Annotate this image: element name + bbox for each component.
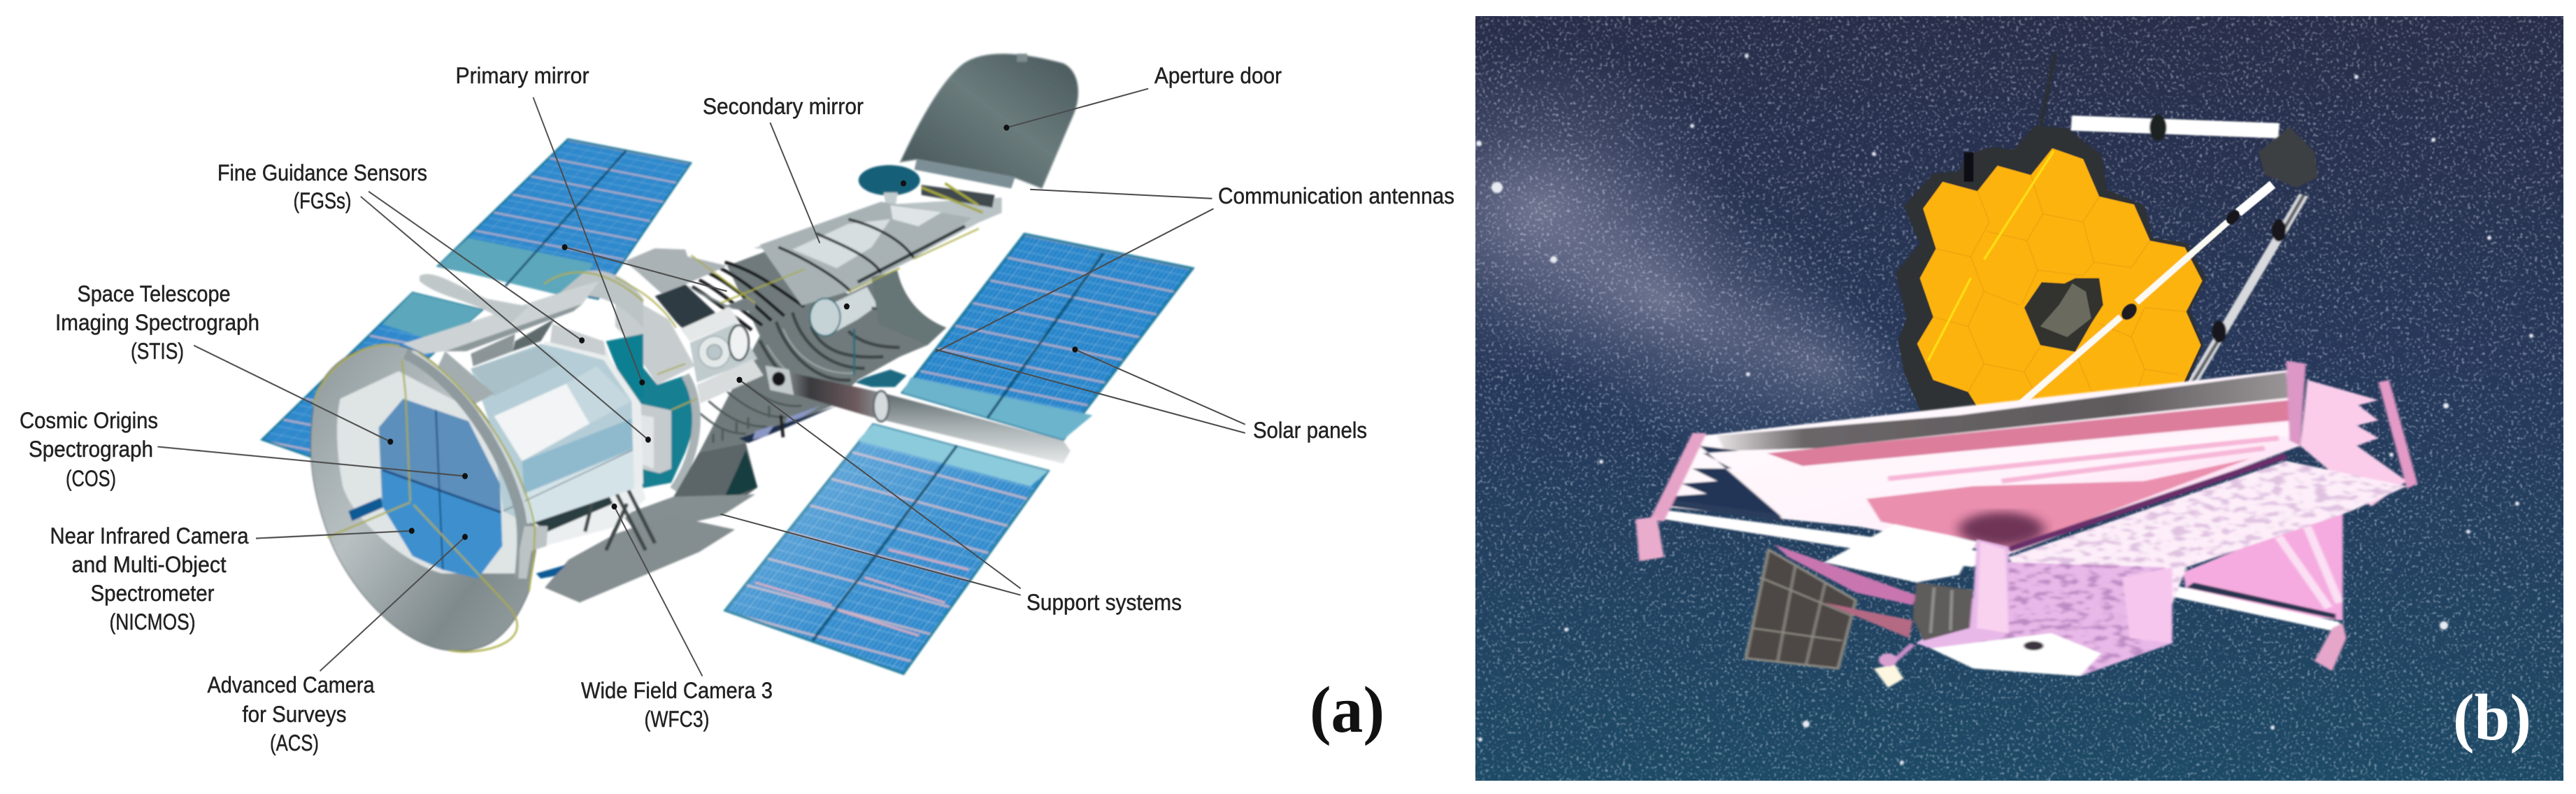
component labels [20,63,1454,756]
label: secondary mirror: Secondary mirror [703,94,864,119]
illustration: Hubble telescope body and solar arrays [262,54,1193,674]
label: COS: Spectrograph [29,437,153,462]
label: ACS: Advanced Camera [207,672,375,697]
pink shadow area [1866,458,2250,550]
spacecraft bus [1917,539,2173,676]
yellow thermal wires [313,272,643,652]
white radiator box [1824,524,1977,583]
label: WFC3 [581,678,773,732]
label: NICMOS: (NICMOS) [109,609,196,635]
grey cube [1913,583,1973,641]
left beam and post [1653,509,1987,567]
label: COS: Cosmic Origins [20,408,158,433]
aperture door and high-gain antenna [754,54,1078,258]
lower equipment and skirt [527,460,735,602]
JWST golden primary mirror [1896,126,2273,418]
boom arm across the telescope [766,366,1071,463]
label: STIS: Imaging Spectrograph [55,310,259,335]
panel: Hubble Space Telescope cutaway diagram (a) [20,54,1454,756]
label: NICMOS: Near Infrared Camera [50,523,249,548]
sunshield grey top band [1717,372,2289,451]
label: WFC3: Wide Field Camera 3 [581,678,773,703]
label: solar panels: Solar panels [1253,418,1367,443]
label: ACS [207,672,375,756]
right leaders [720,89,1245,595]
panel: James Webb Space Telescope in space (b) [1475,16,2563,781]
label: WFC3: (WFC3) [645,707,709,732]
leader lines with endpoint dots [157,89,1245,676]
panel tag (a): (a) [1310,674,1384,746]
label: NICMOS [50,523,249,635]
label: NICMOS: Spectrometer [91,581,215,606]
high-gain antenna [1874,644,1913,688]
solar panel: right upper wing [903,234,1193,439]
JWST sunshield, pink layers [1636,360,2417,688]
rear barrel with ribs, equipment section and secondary mirror housing [692,201,972,453]
label: STIS [55,281,259,364]
starry sky background [1475,16,2563,781]
left jagged edge [1664,446,1781,516]
label: primary mirror: Primary mirror [456,63,589,88]
label: COS: (COS) [66,466,116,491]
label: aperture door: Aperture door [1154,63,1282,88]
label: support systems: Support systems [1026,590,1182,615]
label: NICMOS: and Multi-Object [71,552,227,577]
yellow wires on the rear section [615,229,979,410]
panel tag (b): (b) [2453,681,2531,754]
speckled diagonal beam [2009,461,2407,623]
forward shell, ring and teal bulkhead [615,248,764,532]
label: communication antennas: Communication antennas [1218,183,1454,208]
label: ACS: (ACS) [270,730,319,756]
label: fine guidance sensors: Fine Guidance Sensors [217,160,427,185]
JWST secondary mirror tripod and antenna [2041,53,2318,392]
right posts and fins [2300,380,2407,506]
upper boom behind aperture tube [420,274,529,324]
right lower sail and beam [2183,506,2343,621]
label: COS [20,408,158,491]
label: STIS: (STIS) [131,339,184,364]
left leaders [157,97,727,676]
label: fine guidance sensors: (FGSs) [294,188,351,213]
label: fine guidance sensors [217,160,427,213]
solar array [1746,544,1917,669]
sunshield red band [1767,400,2293,466]
aperture tube, instrument bay and instrument blocks [310,270,643,651]
solar panel: right lower wing [725,425,1048,674]
label: ACS: for Surveys [242,702,347,727]
sunshield main sheet [1661,370,2300,555]
label: STIS: Space Telescope [77,281,231,306]
solar panel: upper left wing [262,139,691,458]
